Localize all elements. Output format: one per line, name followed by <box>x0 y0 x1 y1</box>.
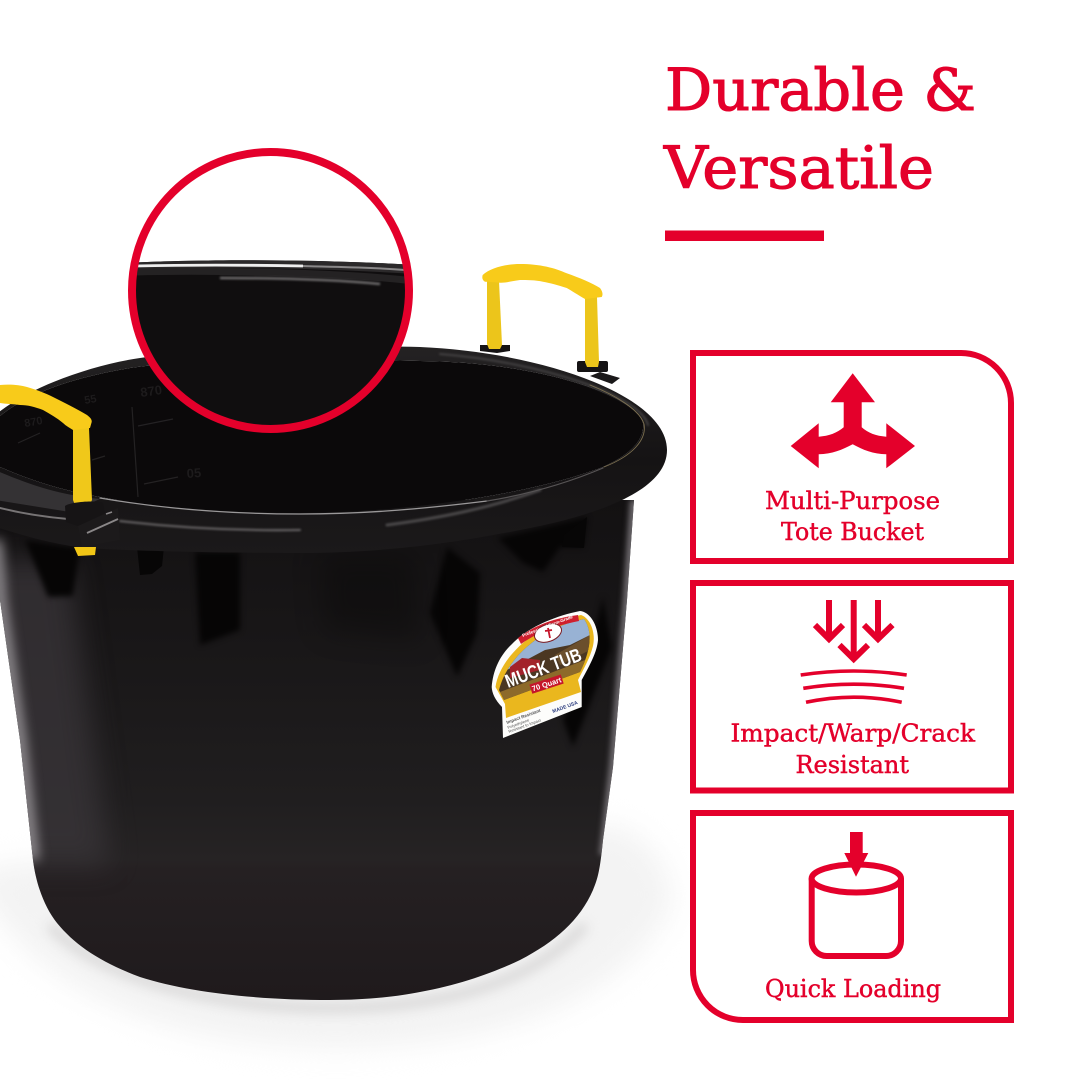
tub body <box>0 500 634 1000</box>
label: multi-purpose: Multi-Purpose <box>765 487 940 515</box>
panel: impact resistant <box>693 583 1011 790</box>
label: multi-purpose: Tote Bucket <box>781 518 924 546</box>
label: barn scene <box>499 619 590 700</box>
rim highlights <box>0 354 648 530</box>
label: fine print: Impact Resistant <box>506 708 542 725</box>
label: impact resistant: Impact/Warp/Crack <box>730 720 975 748</box>
product photo: black muck tub <box>0 264 667 1000</box>
interior measurement marks: 05 <box>186 465 202 481</box>
title underline <box>665 230 824 241</box>
label: fine print: Polyethylene <box>507 717 531 730</box>
far handle: yellow <box>480 264 620 384</box>
title: Durable & <box>665 56 976 124</box>
label: quick loading: Quick Loading <box>765 975 941 1003</box>
tub rim <box>0 346 667 553</box>
interior measurement marks <box>18 382 202 497</box>
title: Versatile <box>663 134 934 202</box>
label: product name: MUCK TUB <box>502 645 585 693</box>
icon: three-way arrows <box>791 373 915 468</box>
panel: quick loading <box>693 813 1011 1020</box>
near handle: yellow <box>0 385 120 556</box>
label: white die-cut <box>492 611 598 738</box>
tub interior <box>0 359 643 513</box>
title <box>663 56 976 202</box>
label: fine print: Resistant to Impact <box>508 717 542 734</box>
label: banner: Professional Farm-Grade <box>521 614 574 638</box>
panel: multi-purpose <box>693 353 1011 561</box>
label: capacity: 70 Quart <box>531 675 563 693</box>
label: fine print: MADE USA <box>552 700 579 715</box>
icon: impact arrows on layers <box>801 600 907 702</box>
detail inset circle <box>125 152 415 435</box>
product label <box>492 610 600 738</box>
interior measurement marks: 55 <box>83 393 98 407</box>
interior measurement marks: 870 <box>139 382 163 400</box>
icon: bucket with arrow <box>812 832 901 956</box>
label: yellow band <box>496 615 594 718</box>
floor shadow <box>0 825 672 1048</box>
label: impact resistant <box>730 720 975 779</box>
body reflections and shadows <box>0 500 634 866</box>
label: multi-purpose <box>765 487 940 546</box>
interior measurement marks: 870 <box>23 415 44 430</box>
label: impact resistant: Resistant <box>796 751 909 779</box>
label: fine print <box>506 700 579 734</box>
